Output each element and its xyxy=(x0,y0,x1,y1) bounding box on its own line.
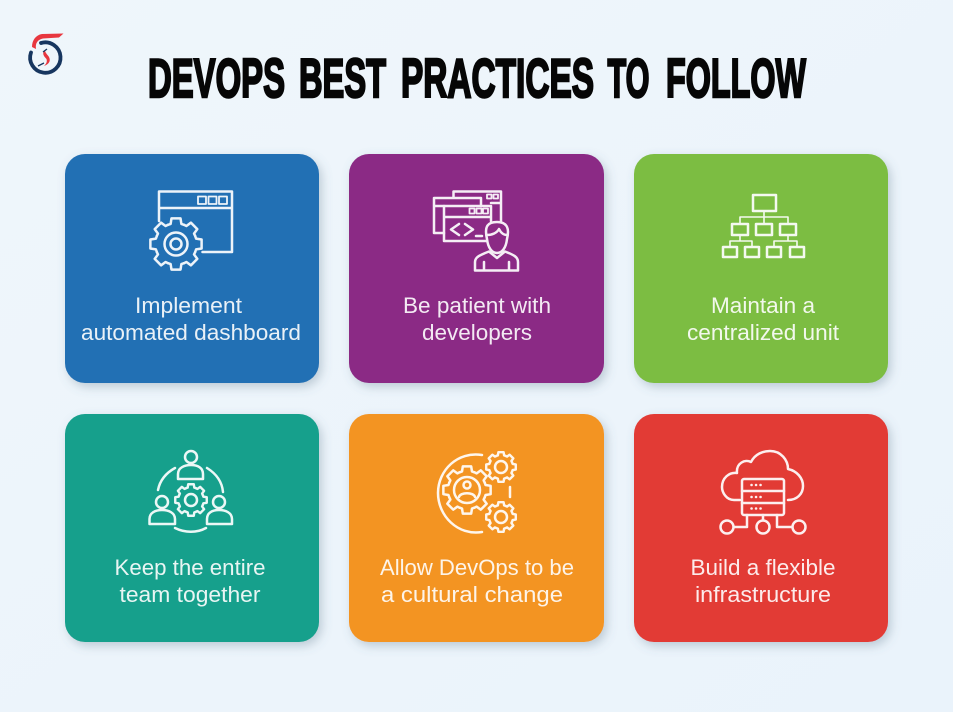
card text xyxy=(403,293,551,345)
card text: Keep the entire xyxy=(114,555,266,580)
icon: gears with person xyxy=(438,452,516,533)
icon: cloud server xyxy=(720,451,806,534)
card text: Maintain a xyxy=(711,293,815,318)
panel: build a flexible infrastructure xyxy=(634,414,888,642)
panel: allow devops to be a cultural change xyxy=(349,414,604,642)
card text: Implement xyxy=(135,293,243,318)
card text xyxy=(687,293,840,345)
card text: infrastructure xyxy=(695,582,831,607)
card text xyxy=(114,555,266,607)
card text xyxy=(690,555,836,607)
title: TO xyxy=(608,47,650,109)
panel: keep the entire team together xyxy=(65,414,319,642)
card text xyxy=(81,293,301,345)
title xyxy=(148,47,806,109)
card text: Allow DevOps to be xyxy=(380,555,574,580)
icon: hierarchy xyxy=(723,195,804,257)
panel: maintain a centralized unit xyxy=(634,154,888,383)
panel: implement automated dashboard xyxy=(65,154,319,383)
icon: code windows and developer xyxy=(434,192,518,270)
title: FOLLOW xyxy=(666,47,806,109)
icon: dashboard window with gear xyxy=(150,192,232,270)
card text: automated dashboard xyxy=(81,320,301,345)
logo xyxy=(30,34,63,73)
card text: team together xyxy=(120,582,261,607)
title: PRACTICES xyxy=(401,47,594,109)
panel: be patient with developers xyxy=(349,154,604,383)
card text xyxy=(380,555,574,607)
card text: a cultural change xyxy=(381,582,563,607)
card text: Be patient with xyxy=(403,293,551,318)
title: DEVOPS xyxy=(148,47,285,109)
card text: Build a flexible xyxy=(690,555,836,580)
card text: developers xyxy=(422,320,532,345)
card text: centralized unit xyxy=(687,320,840,345)
title: BEST xyxy=(299,47,386,109)
icon: team around gear xyxy=(150,451,232,532)
